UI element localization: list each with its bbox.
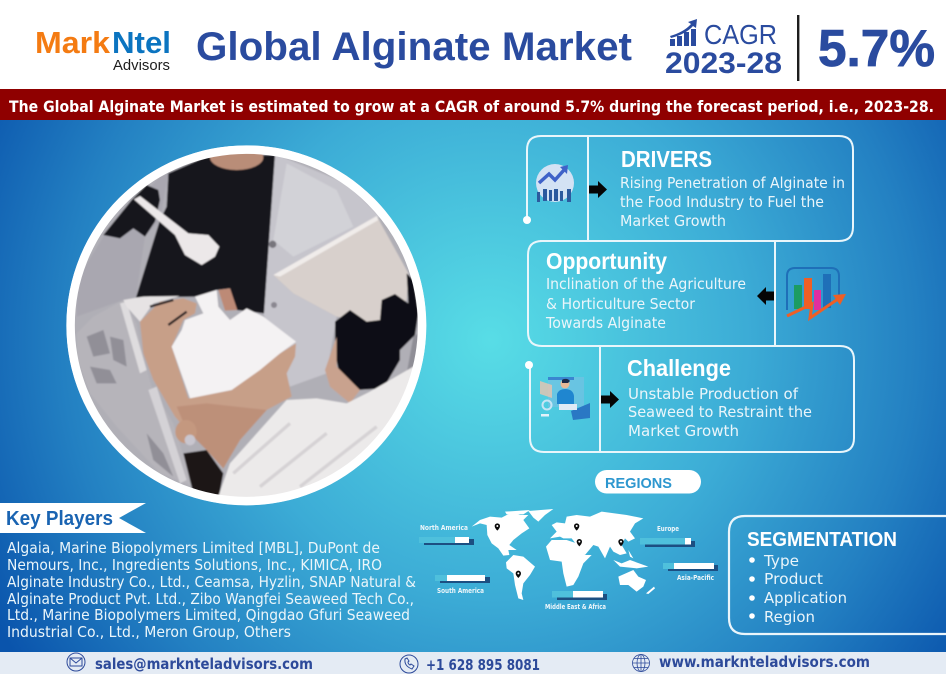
CAGR block: 2023-28 xyxy=(665,47,782,80)
panel: drivers xyxy=(523,136,853,241)
panel: challenge xyxy=(525,355,812,440)
arrow: right xyxy=(589,181,607,198)
drivers text: Rising Penetration of Alginate in xyxy=(620,174,845,192)
heading: challenge: Challenge xyxy=(627,355,731,381)
region: South America xyxy=(435,575,490,595)
segmentation list: Type xyxy=(763,552,799,570)
logo: MarkNtel Advisors: Ntel xyxy=(112,25,171,60)
region: Middle East & Africa xyxy=(545,591,607,611)
icon: email xyxy=(67,653,85,671)
icon: growth bars with arrow xyxy=(670,19,697,46)
region: South America: South America xyxy=(437,587,484,595)
logo: MarkNtel Advisors: Mark xyxy=(35,25,111,60)
icon: person with data screens xyxy=(540,377,590,420)
icon: globe xyxy=(632,654,650,672)
logo: MarkNtel Advisors xyxy=(35,25,171,74)
region: Asia-Pacific xyxy=(663,563,718,582)
challenge text xyxy=(628,385,812,440)
logo: MarkNtel Advisors: Advisors xyxy=(113,57,170,74)
challenge text: Market Growth xyxy=(628,422,739,440)
segmentation list: Region xyxy=(764,608,815,626)
heading: segmentation: SEGMENTATION xyxy=(747,529,897,551)
challenge text: Seaweed to Restraint the xyxy=(628,403,812,421)
region: North America xyxy=(419,524,474,545)
key players text: Alginate Product Pvt. Ltd., Zibo Wangfei Seaweed Tech Co., xyxy=(7,590,414,608)
key players text: Algaia, Marine Biopolymers Limited [MBL], DuPont de xyxy=(7,539,380,557)
arrow: left xyxy=(757,287,774,305)
CAGR divider xyxy=(797,15,799,81)
email: sales@marknteladvisors.com xyxy=(95,655,313,673)
heading: drivers: DRIVERS xyxy=(621,146,712,172)
key players text xyxy=(7,539,416,641)
region: Middle East & Africa: Middle East & Africa xyxy=(545,603,606,611)
icon: bar chart with orange arrow xyxy=(787,268,846,318)
connector dot xyxy=(523,216,531,224)
key players banner xyxy=(0,503,146,533)
CAGR value: 5.7% xyxy=(818,20,935,78)
key players text: Industrial Co., Ltd., Meron Group, Others xyxy=(7,623,291,641)
drivers text xyxy=(620,174,845,230)
photo: facial mask treatment in circle xyxy=(60,140,430,510)
region: North America: North America xyxy=(420,524,468,532)
panel: opportunity xyxy=(528,241,854,452)
challenge text: Unstable Production of xyxy=(628,385,799,403)
region: Europe: Europe xyxy=(657,525,679,533)
drivers text: Market Growth xyxy=(620,212,726,230)
connector dot xyxy=(525,361,533,369)
footer band xyxy=(0,652,946,674)
key players text: Ltd., Marine Biopolymers Limited, Qingdao Gfuri Seaweed xyxy=(7,606,410,624)
opportunity text: & Horticulture Sector xyxy=(546,295,696,313)
opportunity text xyxy=(545,275,746,332)
main gradient background xyxy=(0,120,946,652)
key players text: Alginate Industry Co., Ltd., Ceamsa, Hyzlin, SNAP Natural & xyxy=(7,573,416,591)
opportunity text: Inclination of the Agriculture xyxy=(546,275,746,293)
phone: +1 628 895 8081 xyxy=(426,656,540,674)
CAGR block xyxy=(665,19,782,80)
arrow: right xyxy=(601,391,619,408)
segmentation list xyxy=(749,552,847,626)
segmentation list: Application xyxy=(764,589,847,607)
location pins xyxy=(495,523,624,578)
icon: people with growth arrow xyxy=(536,164,574,202)
panel: segmentation xyxy=(729,516,946,634)
world map xyxy=(472,509,655,600)
regions heading pill: REGIONS xyxy=(605,475,672,492)
heading: opportunity: Opportunity xyxy=(546,248,667,274)
title: Global Alginate Market xyxy=(196,25,632,69)
drivers text: the Food Industry to Fuel the xyxy=(620,193,824,211)
region: Asia-Pacific: Asia-Pacific xyxy=(677,574,714,582)
key players banner: Key Players xyxy=(6,508,113,530)
CAGR block: CAGR xyxy=(704,19,777,50)
icon: phone xyxy=(400,655,418,673)
opportunity frame xyxy=(528,241,854,452)
segmentation list: Product xyxy=(764,570,823,588)
regions heading pill xyxy=(595,470,701,494)
drivers frame xyxy=(527,136,853,241)
header band xyxy=(0,0,946,89)
opportunity text: Towards Alginate xyxy=(545,314,666,332)
key players text: Nemours, Inc., Ingredients Solutions, Inc., KIMICA, IRO xyxy=(7,556,382,574)
region: Europe xyxy=(640,525,695,547)
website: www.marknteladvisors.com xyxy=(659,653,870,671)
red summary banner xyxy=(0,89,946,120)
